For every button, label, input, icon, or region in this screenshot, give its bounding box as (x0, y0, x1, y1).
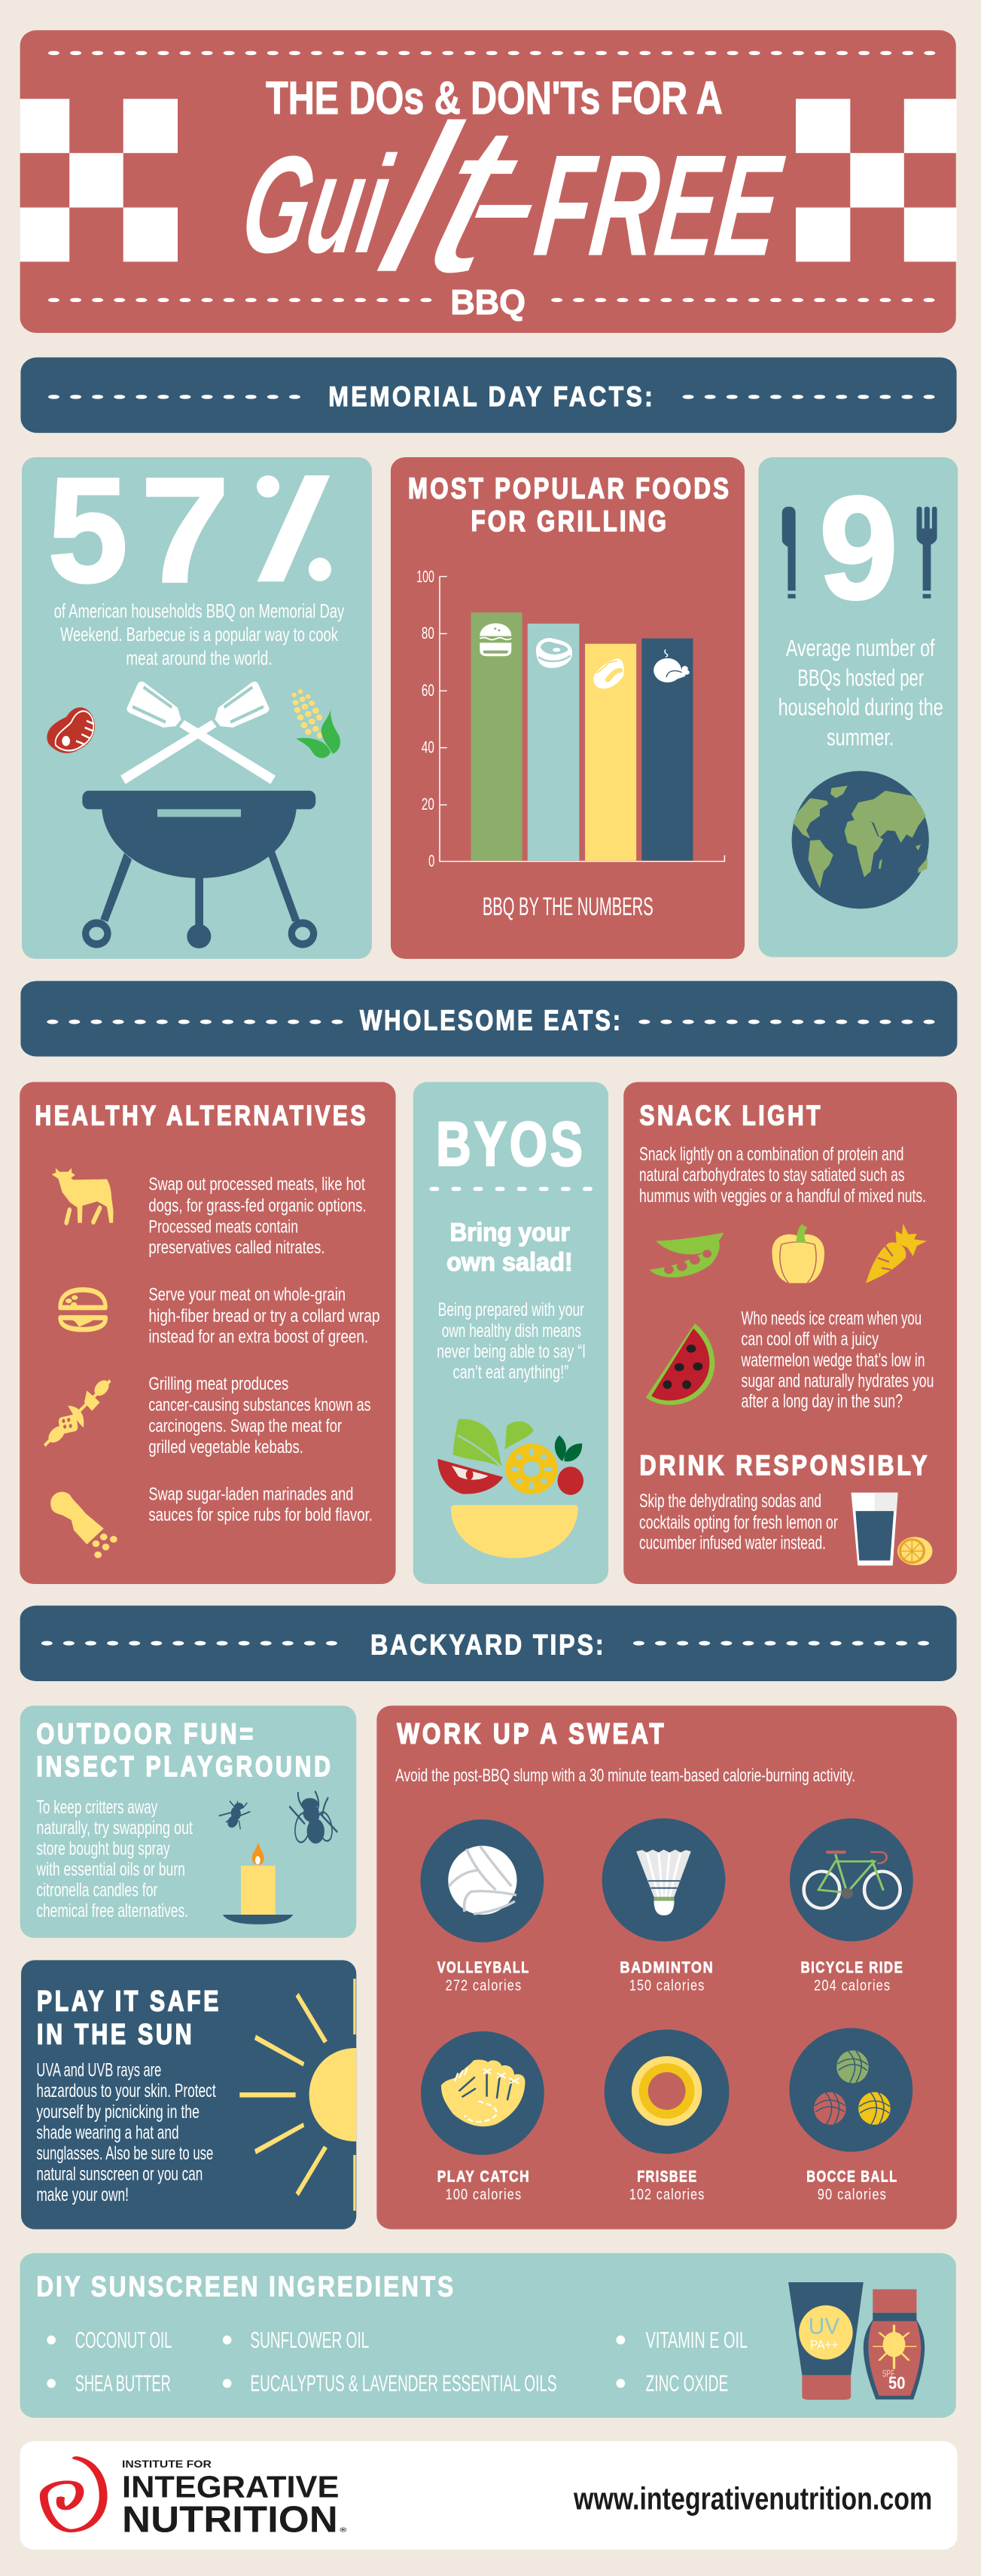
bar chart: 0 (428, 852, 434, 871)
logo: wordmark (122, 2458, 346, 2540)
activity: bicycle ride: 204 calories (814, 1976, 891, 1994)
text: sun tip: make your own! (36, 2184, 129, 2205)
text: spice rubs tip: sauces for spice rubs for bold flavor. (148, 1505, 373, 1525)
text: sun tip: sunglasses. Also be sure to use (36, 2143, 213, 2164)
big stat 57%: 7 (141, 447, 230, 614)
text: insect tip: chemical free alternatives. (36, 1900, 188, 1921)
text: sun tip: natural sunscreen or you can (36, 2164, 203, 2184)
panel: outdoor fun (20, 1706, 356, 1938)
panel: title header (20, 30, 957, 333)
icon: sunscreen tube: PA++ (810, 2337, 839, 2352)
heading: snack light: SNACK LIGHT (639, 1100, 823, 1131)
stat description: Weekend. Barbecue is a popular way to cook (60, 623, 338, 646)
panel: title header: BBQ (450, 282, 526, 322)
activity: frisbee (605, 2029, 730, 2203)
text: insect tip: with essential oils or burn (35, 1859, 185, 1880)
icon: burger (60, 1290, 106, 1329)
text: processed meats tip (148, 1174, 367, 1258)
panel heading: IN THE SUN (37, 2019, 194, 2051)
text: drink description: Skip the dehydrating sodas and (639, 1490, 821, 1512)
panel heading (36, 1718, 334, 1783)
icon: knife (782, 507, 796, 598)
icon: crossed spatulas (120, 682, 276, 784)
ingredient list: SUNFLOWER OIL (250, 2327, 369, 2353)
text: spice rubs tip: Swap sugar-laden marinades and (148, 1484, 353, 1504)
icon: small fly (219, 1801, 250, 1830)
subheading: bring your own salad (446, 1218, 573, 1277)
activity: bocce ball: 90 calories (818, 2186, 887, 2203)
subheading: bring your own salad: own salad! (446, 1248, 573, 1277)
icon: lemon (897, 1537, 932, 1565)
panel heading: PLAY IT SAFE (37, 1985, 221, 2018)
text: byos description: never being able to say “I (437, 1341, 586, 1362)
activity: badminton: 150 calories (629, 1976, 705, 1994)
heading: guilt-free script: Gui (231, 127, 403, 282)
text: drink description: cucumber infused water instead. (639, 1532, 826, 1553)
text: byos description: own healthy dish means (442, 1320, 581, 1341)
text: insect tip (35, 1797, 193, 1921)
heading: guilt-free script (231, 82, 791, 316)
activity: volleyball: 272 calories (446, 1976, 522, 1994)
panel heading: MOST POPULAR FOODS (408, 472, 731, 505)
big stat 9: 9 (819, 466, 898, 630)
text: processed meats tip: dogs, for grass-fed organic options. (148, 1195, 367, 1216)
icon: sunscreen bottle: SPF (882, 2368, 894, 2379)
icon: carrot (866, 1223, 927, 1283)
activity: frisbee: FRISBEE (637, 2166, 698, 2185)
panel heading: INSECT PLAYGROUND (36, 1750, 334, 1783)
panel: healthy alternatives (20, 1082, 396, 1584)
icon: turkey (653, 649, 690, 682)
panel: diy sunscreen ingredients (20, 2253, 956, 2418)
panel: diy sunscreen ingredients: ZINC OXIDE (646, 2370, 728, 2396)
panel: snack light and drink responsibly (623, 1082, 957, 1584)
heading: guilt-free script: lt (361, 82, 539, 316)
icon: sunscreen bottle (864, 2289, 925, 2400)
activity: play catch: PLAY CATCH (437, 2166, 530, 2185)
logo: wordmark: INSTITUTE FOR (122, 2458, 212, 2470)
bar chart (416, 568, 724, 871)
text: bread tip: high-fiber bread or try a collard wrap (148, 1306, 380, 1326)
stat description: summer. (827, 725, 894, 751)
icon: grill (82, 791, 317, 948)
stat description (54, 600, 345, 669)
panel heading: HEALTHY ALTERNATIVES (35, 1100, 368, 1132)
panel: 57 percent (22, 447, 372, 959)
activity: bocce ball (789, 2028, 912, 2203)
text: processed meats tip: Swap out processed meats, like hot (148, 1174, 365, 1194)
logo: spiral mark (44, 2458, 103, 2531)
bar chart: 20 (422, 795, 434, 814)
section bar: wholesome eats (20, 981, 957, 1057)
text: processed meats tip: preservatives called nitrates. (148, 1238, 325, 1258)
activity: bicycle ride: BICYCLE RIDE (800, 1958, 903, 1976)
activity: badminton: BADMINTON (620, 1958, 714, 1976)
panel heading (408, 472, 731, 538)
icon: vegetable kebab (44, 1377, 111, 1446)
activity: volleyball (420, 1820, 544, 1994)
text: drink description: cocktails opting for fresh lemon or (639, 1512, 838, 1533)
big stat 57% (51, 475, 331, 584)
text: watermelon description: can cool off with a juicy (742, 1328, 879, 1350)
text: spice rubs tip (148, 1484, 373, 1525)
text: carcinogens tip (148, 1374, 370, 1457)
text: bread tip: instead for an extra boost of green. (148, 1326, 368, 1347)
text: insect tip: citronella candles for (36, 1880, 157, 1900)
panel: work up a sweat (376, 1706, 957, 2230)
bar chart: 40 (422, 738, 434, 757)
icon: hot dog (593, 658, 624, 688)
subheading: bring your own salad: Bring your (450, 1218, 570, 1247)
panel: most popular foods chart (391, 457, 745, 959)
heading: guilt-free script: - (469, 142, 538, 261)
stat description (778, 636, 943, 751)
stat description: of American households BBQ on Memorial Day (54, 600, 345, 622)
text: sun tip: shade wearing a hat and (36, 2122, 179, 2143)
panel heading (37, 1985, 221, 2051)
bar chart: 100 (416, 568, 434, 587)
icon: steak (536, 638, 572, 668)
activity: play catch: 100 calories (446, 2186, 522, 2203)
activity: bicycle ride (790, 1818, 913, 1994)
icon: bell pepper (772, 1224, 824, 1283)
text: sun tip (36, 2060, 216, 2205)
icon: fork (916, 507, 937, 598)
panel heading: WORK UP A SWEAT (397, 1717, 667, 1750)
panel: footer logo: NUTRITION (122, 2498, 338, 2540)
icon: watermelon (646, 1323, 714, 1405)
activity: bocce ball: BOCCE BALL (806, 2166, 898, 2185)
text: insect tip: naturally, try swapping out (36, 1818, 193, 1839)
ingredient list: COCONUT OIL (75, 2327, 172, 2353)
icon: spice shaker (50, 1492, 117, 1558)
icon: steak (47, 707, 95, 753)
icon: corn (291, 689, 340, 758)
text: sun tip: UVA and UVB rays are (36, 2060, 161, 2081)
icon: peas (650, 1233, 724, 1277)
ingredient list (47, 2327, 748, 2396)
chart caption: BBQ BY THE NUMBERS (483, 892, 653, 920)
text: sun tip: yourself by picnicking in the (36, 2101, 200, 2123)
heading: byos: BYOS (436, 1109, 586, 1179)
icon: sun (239, 1979, 356, 2211)
icon: sunscreen bottle: 50 (888, 2373, 905, 2393)
logo: wordmark: ® (340, 2526, 346, 2534)
checker pattern: left (20, 99, 178, 261)
icon: burger (480, 623, 511, 656)
activity: frisbee: 102 calories (629, 2186, 705, 2203)
panel: footer logo (20, 2441, 957, 2550)
big stat 57%: % (254, 447, 335, 614)
icon: globe (792, 771, 929, 908)
text: insect tip: store bought bug spray (36, 1839, 170, 1860)
activity: volleyball: VOLLEYBALL (437, 1958, 530, 1976)
stat description: meat around the world. (126, 647, 273, 669)
text: bread tip: Serve your meat on whole-grain (148, 1284, 346, 1305)
text: carcinogens tip: carcinogens. Swap the meat for (148, 1415, 342, 1436)
icon: glass of water (851, 1493, 898, 1565)
icon: salad bowl (437, 1419, 583, 1558)
text: carcinogens tip: Grilling meat produces (148, 1374, 288, 1394)
panel: play it safe in the sun (21, 1960, 356, 2230)
text: bread tip (148, 1284, 380, 1347)
text: drink description (639, 1490, 838, 1553)
text: snack description (639, 1143, 926, 1207)
text: watermelon description (741, 1308, 934, 1412)
big stat 57%: 5 (47, 447, 128, 614)
icon: large fly (289, 1791, 337, 1845)
text: sun tip: hazardous to your skin. Protect (36, 2080, 216, 2101)
panel: byos (413, 1082, 608, 1584)
panel: 9 bbqs per summer (758, 457, 958, 957)
text: carcinogens tip: grilled vegetable kebabs. (148, 1437, 303, 1457)
panel: footer logo: INTEGRATIVE (122, 2471, 339, 2504)
text: insect tip: To keep critters away (36, 1797, 158, 1818)
text: byos description (437, 1299, 586, 1382)
text: byos description: Being prepared with your (438, 1299, 584, 1320)
section bar: backyard tips (20, 1606, 957, 1681)
icon: sunscreen tube: UV (809, 2313, 839, 2339)
icon: citronella candle (223, 1842, 293, 1924)
text: processed meats tip: Processed meats contain (148, 1216, 298, 1237)
bar chart: 60 (422, 681, 434, 700)
icon: cow (52, 1168, 114, 1223)
activity: badminton (602, 1818, 725, 1994)
text: byos description: can’t eat anything!” (452, 1361, 568, 1382)
panel heading: OUTDOOR FUN= (36, 1718, 256, 1750)
checker pattern: right (796, 99, 957, 261)
bar chart: 80 (422, 624, 434, 643)
activity: play catch (421, 2031, 544, 2203)
text: carcinogens tip: cancer-causing substances known as (148, 1395, 370, 1415)
ingredient list: SHEA BUTTER (75, 2370, 171, 2396)
section bar: memorial day facts (20, 357, 957, 433)
icon: sunscreen tube (788, 2282, 864, 2400)
panel heading: FOR GRILLING (471, 505, 669, 538)
